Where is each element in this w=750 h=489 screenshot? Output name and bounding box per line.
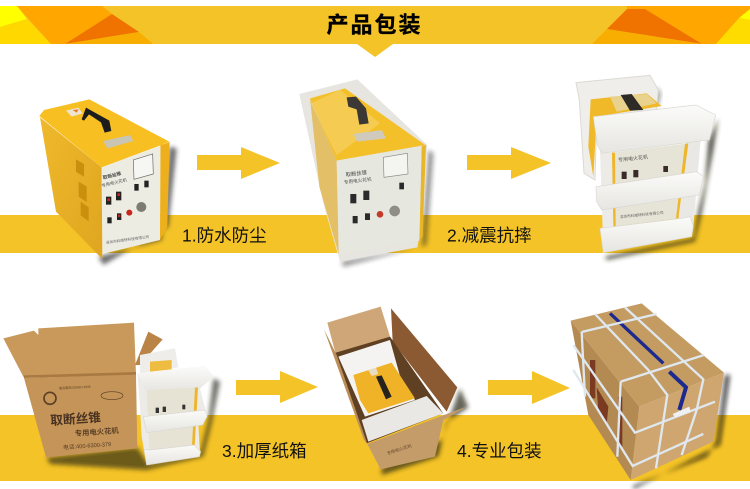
wrapped machine top	[353, 363, 415, 413]
front carton face	[367, 407, 467, 469]
left wall	[324, 329, 367, 444]
side vents	[76, 159, 89, 221]
machine right edge	[160, 142, 170, 240]
wrapped text: 取断丝锥	[345, 168, 368, 179]
label 3: 3.加厚纸箱	[222, 441, 307, 461]
pack panel	[147, 387, 197, 450]
carton top note: 售后服务ISO9001:2008	[59, 384, 91, 390]
wrapped right edge	[419, 145, 426, 240]
machine top	[39, 99, 169, 167]
name plate	[103, 135, 133, 148]
wrapped handle	[347, 97, 369, 125]
wrapped side	[310, 98, 339, 254]
plastic sheen	[610, 94, 657, 112]
blue tape top	[610, 313, 663, 363]
side print	[590, 360, 622, 447]
photo: sealed carton	[571, 303, 730, 488]
front panel	[612, 143, 688, 227]
top handle	[621, 94, 643, 111]
red button	[126, 210, 132, 216]
foam panel text: 专用电火花机	[618, 154, 648, 164]
foam panel footer: 深圳市科威特科技有限公司	[620, 210, 664, 219]
photo: wrapped machine	[299, 79, 433, 267]
carton front	[24, 375, 137, 457]
wrapped name plate	[353, 130, 386, 142]
machine front panel	[102, 146, 160, 254]
carton interior	[333, 337, 443, 443]
machine footer: 深圳市科威特科技有限公司	[105, 234, 150, 245]
wrapped subtext: 专用电火花机	[343, 176, 372, 186]
wrapped front panel	[337, 146, 422, 255]
wrapped knob	[389, 206, 400, 216]
photo: yellow machine	[39, 99, 177, 265]
machine text: 取断丝锥	[102, 170, 122, 181]
right decoration	[592, 6, 750, 44]
wrapped red button	[377, 211, 383, 218]
arrow 3	[236, 371, 318, 403]
carton subtitle: 专用电火花机	[75, 426, 120, 438]
carton badge	[101, 392, 123, 400]
wrapped meter	[383, 153, 408, 177]
warning sticker	[66, 108, 83, 117]
carton logo	[44, 392, 56, 404]
label 2: 2.减震抗摔	[447, 226, 532, 246]
photo: open carton from above	[324, 307, 468, 475]
foam back column	[677, 140, 701, 230]
carton flap right	[135, 332, 163, 365]
carton crease	[23, 372, 136, 378]
back foam	[140, 348, 178, 373]
carton flap back	[3, 323, 136, 377]
middle foam block	[596, 172, 703, 210]
foam column left	[600, 150, 613, 230]
label 1: 1.防水防尘	[182, 226, 267, 246]
wrapped top	[310, 88, 425, 161]
machine handle	[376, 375, 392, 399]
tape tab	[673, 407, 691, 417]
red lights	[107, 193, 120, 217]
yellow machine top	[588, 93, 662, 177]
header banner	[0, 6, 750, 57]
carton phone: 电话:400-6300-379	[63, 440, 111, 451]
label 4: 4.专业包装	[457, 441, 542, 461]
arrow 2	[467, 147, 551, 179]
foam pack top block	[137, 366, 214, 392]
meter	[133, 154, 153, 179]
title: 产品包装	[326, 12, 423, 38]
right flap	[391, 308, 457, 412]
foam panel switches	[622, 166, 668, 179]
inner back flap	[327, 307, 390, 355]
plastic wrap	[299, 79, 427, 262]
top foam block	[593, 105, 716, 153]
photo: foam packed machine	[576, 75, 718, 260]
pack middle foam	[143, 410, 207, 433]
box right face	[631, 373, 724, 480]
wrapped switches	[350, 183, 404, 223]
machine side	[40, 117, 102, 259]
pack bottom foam	[144, 445, 201, 465]
sticker	[368, 368, 378, 376]
left decoration	[0, 6, 153, 44]
machine subtext: 专用电火花机	[101, 176, 128, 189]
back foam	[576, 75, 658, 180]
front foam	[362, 396, 443, 442]
foam pack body	[137, 366, 214, 465]
yellow band: row 1	[0, 215, 750, 253]
box left face	[571, 321, 639, 480]
carton headline: 取断丝锥	[50, 409, 102, 428]
switches	[106, 181, 149, 223]
bottom foam block	[600, 217, 693, 253]
foam back	[338, 340, 415, 417]
machine handle	[82, 108, 111, 133]
wrap highlights	[311, 90, 380, 155]
photo: open carton with foam	[3, 323, 220, 470]
straps	[573, 307, 715, 468]
knob	[136, 202, 146, 212]
arrow 4	[488, 371, 570, 404]
arrow 1	[197, 147, 280, 179]
yellow band: row 2	[0, 415, 750, 481]
box top face	[571, 303, 724, 407]
pack switches	[156, 405, 185, 413]
carton print: 专用电火花机	[386, 442, 413, 457]
blue tape front	[669, 372, 686, 410]
